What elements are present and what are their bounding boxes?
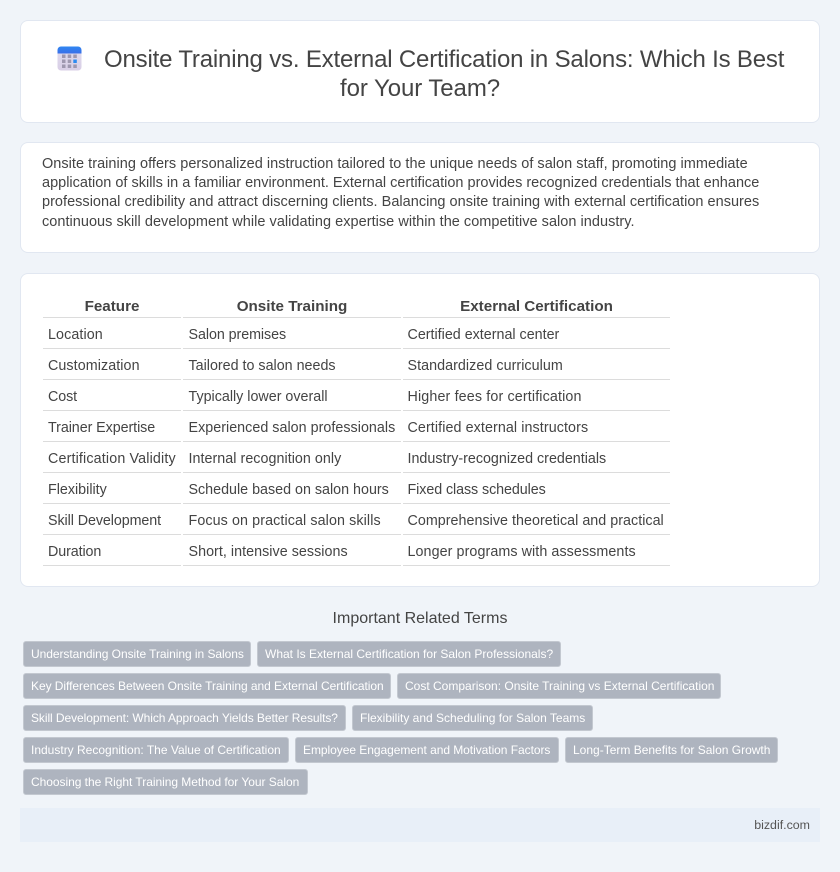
panel: introduction [20,142,820,253]
table row: Certification Validity [43,451,670,473]
table row: Location: Location [48,327,103,343]
tag [23,641,251,667]
table row: Location: Certified external center [408,327,559,343]
title card [20,20,820,123]
tag [352,705,593,731]
table row: Location [43,327,670,349]
table row: Cost: Cost [48,389,77,405]
tag [23,673,391,699]
table row: Trainer Expertise: Certified external instructors [408,420,588,436]
text block: introduction [42,156,759,230]
table row: Skill Development: Skill Development [48,513,161,529]
table row: Customization: Standardized curriculum [408,358,563,374]
table row: Flexibility: Flexibility [48,482,107,498]
table row: Duration: Longer programs with assessments [408,544,636,560]
text block: introduction: application of skills in a familiar environment. External certification provides recognized credentials that enhance [42,175,759,191]
tag [23,737,289,763]
table header: Onsite Training [237,298,347,315]
table row: Skill Development: Focus on practical salon skills [188,513,381,529]
table row: Certification Validity: Industry-recognized credentials [408,451,606,467]
tag: Cost Comparison: Onsite Training vs External Certification [405,679,714,693]
heading: important related terms: Important Related Terms [333,610,507,627]
table row: Trainer Expertise: Experienced salon professionals [188,420,395,436]
table header: Feature [85,298,139,315]
title: Onsite Training vs. External Certification in Salons: Which Is Best [104,46,784,73]
tag: Skill Development: Which Approach Yields Better Results? [31,711,338,725]
table row: Flexibility: Fixed class schedules [408,482,546,498]
text block: introduction: Onsite training offers personalized instruction tailored to the unique needs of salon staff, promoting immediate [42,156,748,172]
tag: Employee Engagement and Motivation Factors [303,743,550,757]
title: for Your Team? [340,75,500,102]
text block: introduction: continuous skill development while validating expertise within the competitive salon industry. [42,214,635,230]
footer [20,808,820,842]
tag [23,705,346,731]
table row: Customization [43,358,670,380]
panel: comparison table [20,273,820,587]
table row: Flexibility [43,482,670,504]
table row: Certification Validity: Certification Validity [48,451,176,467]
tag [397,673,721,699]
table header [85,298,613,315]
table row: Duration: Short, intensive sessions [188,544,348,560]
tag: Choosing the Right Training Method for Your Salon [31,775,299,789]
tag: Understanding Onsite Training in Salons [31,647,244,661]
table row: Cost [43,389,670,411]
table row: Trainer Expertise: Trainer Expertise [48,420,155,436]
tag: Industry Recognition: The Value of Certification [31,743,281,757]
table row: Flexibility: Schedule based on salon hours [188,482,389,498]
table row: Customization: Customization [48,358,140,374]
icon: calendar [58,46,82,70]
table row: Skill Development [43,513,670,535]
tag: Long-Term Benefits for Salon Growth [573,743,770,757]
tag: Key Differences Between Onsite Training and External Certification [31,679,384,693]
title [104,46,784,102]
table row: Certification Validity: Internal recognition only [188,451,341,467]
tag [565,737,778,763]
table row: Trainer Expertise [43,420,670,442]
footer source: bizdif.com [754,818,810,832]
tag [295,737,559,763]
table row: Duration: Duration [48,544,101,560]
text block: introduction: professional credibility and attract discerning clients. Balancing onsite training with external certification ensures [42,194,759,210]
table row: Cost: Typically lower overall [188,389,328,405]
tag: Flexibility and Scheduling for Salon Teams [360,711,585,725]
table row: Customization: Tailored to salon needs [188,358,336,374]
tag [257,641,561,667]
tag: What Is External Certification for Salon Professionals? [265,647,553,661]
table row: Skill Development: Comprehensive theoretical and practical [408,513,664,529]
table row: Location: Salon premises [188,327,286,343]
table row: Duration [43,544,670,566]
related terms tags [23,641,778,795]
table row: Cost: Higher fees for certification [408,389,582,405]
tag [23,769,308,795]
table header: External Certification [460,298,613,315]
